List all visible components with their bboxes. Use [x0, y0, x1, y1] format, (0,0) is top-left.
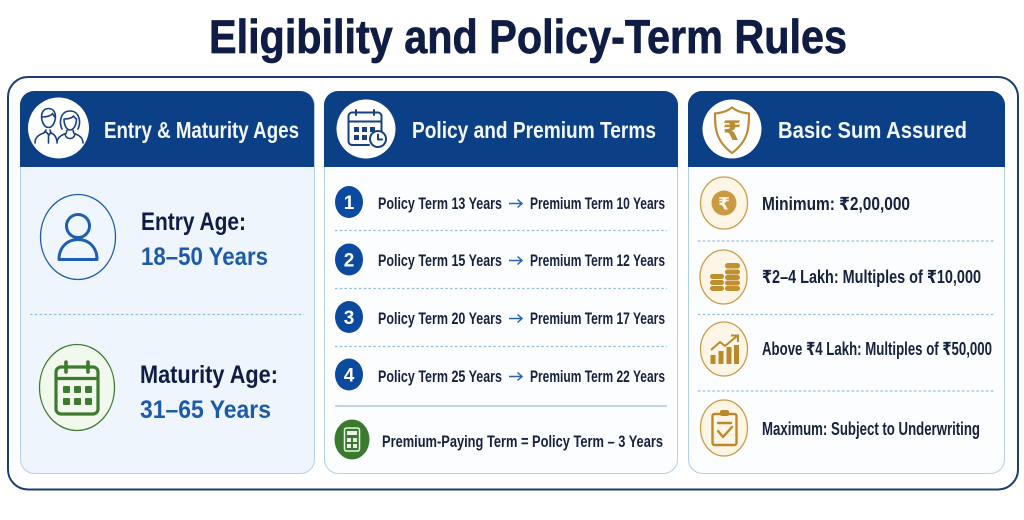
- row 3: [335, 301, 665, 333]
- number badge 1: 1: [344, 193, 355, 214]
- policy term: Policy Term 25 Years: [378, 368, 502, 386]
- icon: calendar: [40, 344, 114, 430]
- panel heading: Policy and Premium Terms: [412, 117, 656, 143]
- premium term: Premium Term 12 Years: [530, 252, 665, 270]
- row: maximum: [700, 400, 980, 456]
- icon: two people: [28, 98, 89, 158]
- formula text: Premium-Paying Term = Policy Term – 3 Years: [382, 433, 663, 451]
- number badge 3: 3: [344, 308, 354, 329]
- number badge 3: [335, 301, 363, 333]
- panel header: entry and maturity ages: [20, 91, 314, 167]
- arrow: [509, 372, 522, 380]
- row 2: [335, 244, 665, 276]
- panel header: basic sum assured: [688, 91, 1005, 167]
- icon: clipboard check: [700, 400, 748, 456]
- value: maturity age: 31–65 Years: [140, 396, 271, 424]
- number badge 2: 2: [344, 250, 354, 272]
- row: minimum: [700, 177, 910, 229]
- arrow: [509, 256, 522, 264]
- icon: rupee coin: [700, 177, 748, 229]
- row 1: [335, 186, 665, 218]
- number badge 1: [335, 186, 363, 218]
- arrow: [509, 200, 522, 208]
- icon: rupee shield: [702, 100, 762, 158]
- number badge 4: [335, 358, 363, 390]
- number badge 4: 4: [344, 366, 355, 386]
- panel: basic sum assured: [688, 91, 1005, 474]
- icon: calendar with clock: [336, 100, 396, 158]
- premium term: Premium Term 22 Years: [530, 368, 665, 386]
- row: 2 to 4 lakh: [700, 250, 981, 304]
- row: entry age: [40, 194, 268, 280]
- icon: person: [40, 194, 116, 280]
- policy term: Policy Term 20 Years: [378, 310, 502, 328]
- row: above 4 lakh: [700, 322, 992, 376]
- icon: growth chart: [700, 322, 748, 376]
- policy term: Policy Term 13 Years: [378, 195, 502, 213]
- formula row: [334, 420, 663, 460]
- label: entry age: Entry Age:: [141, 208, 246, 236]
- panel: policy and premium terms: [324, 91, 678, 474]
- panel header: policy and premium terms: [324, 91, 678, 167]
- premium term: Premium Term 10 Years: [530, 195, 665, 213]
- panel: entry and maturity ages: [20, 91, 314, 474]
- outer frame: [8, 77, 1018, 490]
- title: Eligibility and Policy-Term Rules: [209, 10, 847, 63]
- arrow: [509, 314, 522, 322]
- icon: rupee coin: ₹: [718, 194, 730, 214]
- panel heading: Basic Sum Assured: [778, 117, 967, 143]
- icon: calculator: [334, 420, 370, 460]
- minimum text: Minimum: ₹2,00,000: [762, 194, 910, 214]
- number badge 2: [335, 244, 363, 276]
- icon: rupee shield: ₹: [723, 116, 741, 146]
- policy term: Policy Term 15 Years: [378, 252, 502, 270]
- icon: coin stacks: [700, 250, 747, 304]
- row: maturity age: [40, 344, 278, 430]
- value: entry age: 18–50 Years: [141, 243, 268, 271]
- label: maturity age: Maturity Age:: [140, 361, 278, 389]
- premium term: Premium Term 17 Years: [530, 310, 665, 328]
- row 4: [335, 358, 665, 390]
- panel heading: Entry & Maturity Ages: [104, 117, 299, 143]
